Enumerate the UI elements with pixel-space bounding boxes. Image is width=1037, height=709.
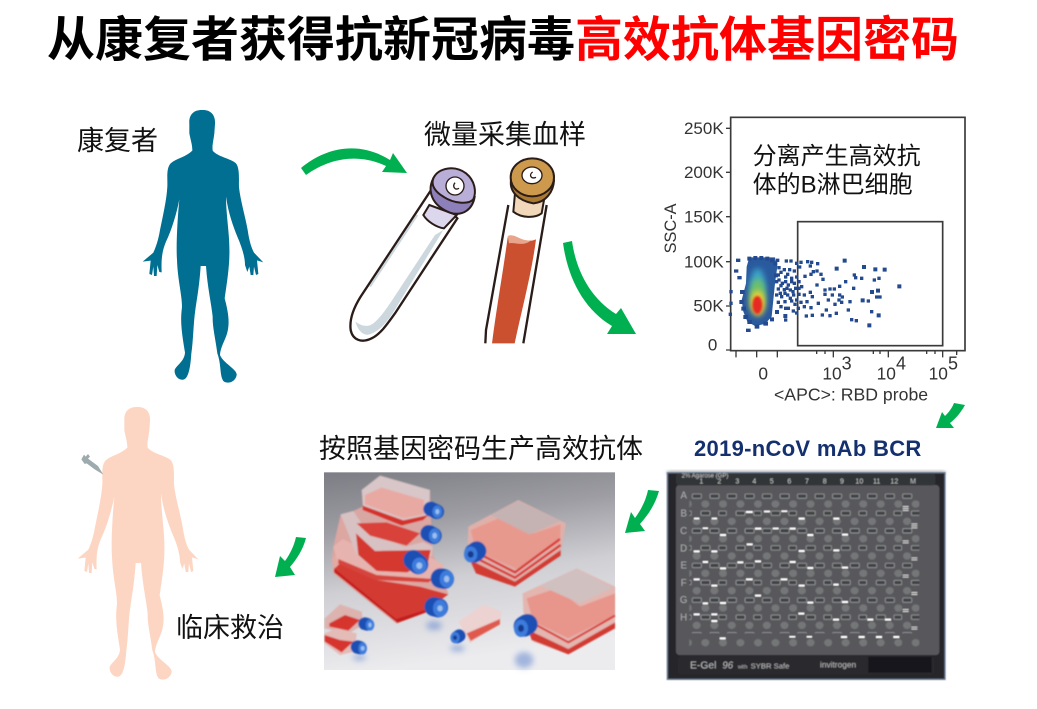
gel top labels: M <box>910 479 916 486</box>
gel top labels: 12 <box>890 479 898 486</box>
gel top labels: 8 <box>823 479 827 486</box>
x axis tick labels: 5 <box>948 353 958 373</box>
gel row labels: C <box>680 526 687 537</box>
y axis title: SSC-A <box>662 203 680 253</box>
gel top labels <box>682 474 916 486</box>
gel top labels: 2% Agarose (GP) <box>682 474 728 480</box>
x axis title: <APC>: RBD probe <box>774 384 928 404</box>
x axis tick labels: 10 <box>822 363 842 383</box>
y axis tick labels: 50K <box>693 297 724 316</box>
icon: syringe <box>81 454 104 474</box>
y axis tick labels: 250K <box>684 119 724 138</box>
gel top labels: 11 <box>873 479 880 486</box>
icon: recovered patient body silhouette <box>142 110 264 383</box>
gel brand text: invitrogen <box>820 659 856 669</box>
flask stack: right upper <box>464 500 566 587</box>
x axis tick labels: 0 <box>758 363 768 383</box>
icon: empty tube with purple cap <box>350 168 475 341</box>
gel row labels: A <box>680 491 687 502</box>
flask caps: left stack <box>412 505 454 617</box>
plot annotation: 体的B淋巴细胞 <box>753 172 913 199</box>
bright DNA bands <box>694 510 899 639</box>
gel brand text: E-Gel96 withSYBR Safe <box>690 660 789 671</box>
cap shadows <box>353 621 533 668</box>
density cluster <box>742 257 777 326</box>
icon: treated patient body silhouette <box>78 407 198 680</box>
gel row labels <box>680 491 687 624</box>
gel top labels: 2 <box>717 479 721 486</box>
x axis tick labels: 3 <box>842 353 852 373</box>
x axis tick labels <box>758 353 958 383</box>
gel row labels: H <box>680 613 687 624</box>
y axis tick labels <box>684 119 724 355</box>
gel top labels: 4 <box>752 479 756 486</box>
y axis tick labels: 200K <box>684 163 724 182</box>
flask: small centre <box>450 604 502 643</box>
gel top labels: 6 <box>787 479 791 486</box>
image: agarose gel <box>666 470 947 681</box>
gel top labels: 10 <box>855 479 863 486</box>
gel top labels: 1 <box>699 479 703 486</box>
gel row labels: G <box>680 595 687 606</box>
x axis tick labels: 10 <box>929 363 948 383</box>
label: recovered patient: 康复者 <box>77 126 158 156</box>
gel top labels: 3 <box>735 479 739 486</box>
title: 从康复者获得抗新冠病毒高效抗体基因密码 <box>47 14 959 67</box>
x axis tick labels: 10 <box>877 363 896 383</box>
size marker ladders <box>903 506 917 630</box>
y axis tick labels: 100K <box>684 252 724 271</box>
flask stack: right lower <box>514 568 615 654</box>
y axis tick labels: 0 <box>708 336 717 355</box>
plot frame and gate <box>726 117 965 357</box>
gel top labels: 9 <box>840 479 844 486</box>
plot annotation: 分离产生高效抗 <box>753 143 921 170</box>
heading: gel title: 2019-nCoV mAb BCR <box>694 436 922 461</box>
icon: blood collection tubes <box>349 157 556 344</box>
flask stack: left <box>332 476 448 624</box>
label: antibody production: 按照基因密码生产高效抗体 <box>319 434 643 464</box>
label: clinical treatment: 临床救治 <box>176 613 284 643</box>
gel top labels: 7 <box>805 479 809 486</box>
chart: flow cytometry scatter plot <box>662 116 966 404</box>
gel top labels: 5 <box>770 479 774 486</box>
gel row labels: E <box>680 561 687 572</box>
label: micro blood sampling: 微量采集血样 <box>424 120 586 150</box>
x axis tick labels: 4 <box>896 353 906 373</box>
gel row labels: B <box>680 508 687 519</box>
gel brand text <box>690 659 856 671</box>
flasks: small left <box>325 604 374 655</box>
icon: blood-filled tube with tan cap <box>485 158 554 343</box>
gel row labels: D <box>680 543 687 554</box>
y axis tick labels: 150K <box>684 207 724 226</box>
gel row labels: F <box>681 578 687 589</box>
image: cell culture flasks <box>324 472 616 672</box>
scatter events <box>729 256 901 332</box>
